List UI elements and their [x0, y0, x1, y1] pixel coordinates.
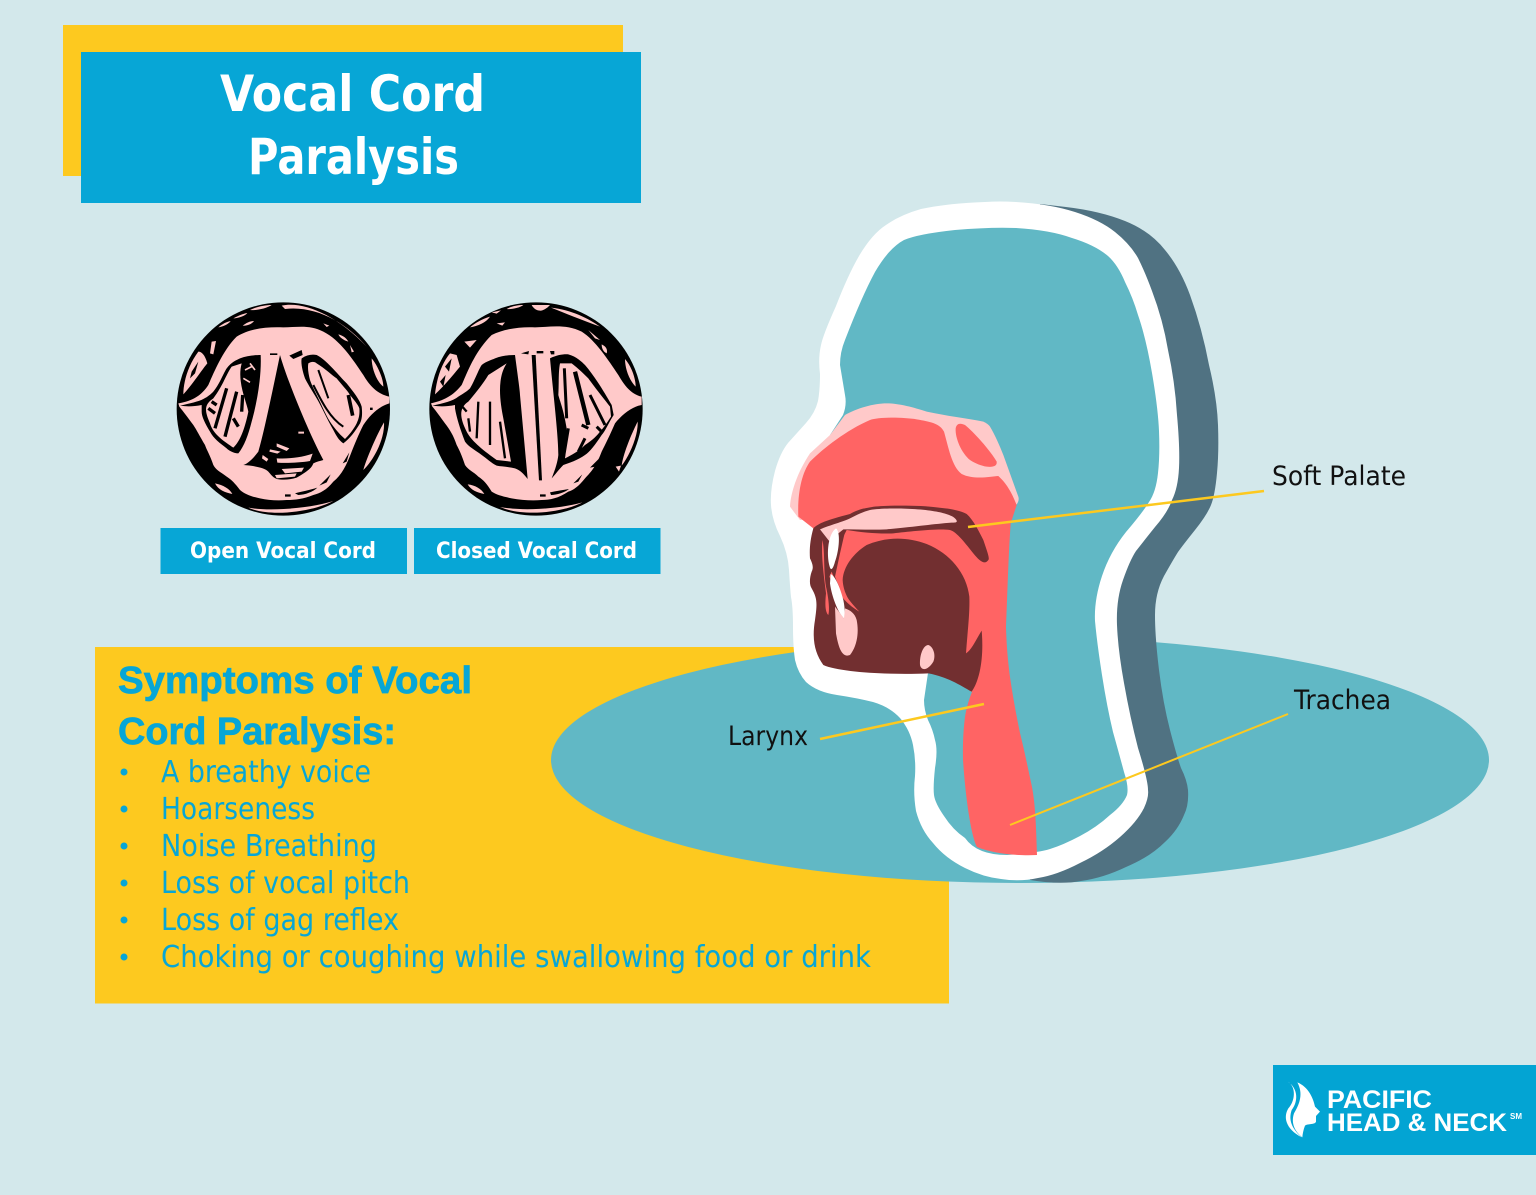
- logo: Pacific Head & Neck: PACIFIC: [1327, 1086, 1432, 1114]
- head shadow: [1030, 204, 1218, 883]
- panel: symptoms text: [118, 660, 872, 975]
- icon: closed vocal cord: [429, 302, 643, 516]
- panel: symptoms text: Choking or coughing while swallowing food or drink: [161, 940, 872, 975]
- line: larynx pointer: [820, 704, 984, 739]
- lower lip pink: [835, 607, 858, 656]
- panel: symptoms text: Noise Breathing: [161, 829, 377, 864]
- teeth: [828, 528, 845, 618]
- icon: face profile: [1286, 1082, 1320, 1137]
- line: soft palate pointer: [968, 491, 1264, 527]
- panel: symptoms text: Loss of vocal pitch: [161, 866, 410, 901]
- line: trachea pointer: [1010, 714, 1288, 825]
- label: larynx: Larynx: [728, 721, 808, 752]
- ellipse: head shadow base: [551, 637, 1489, 883]
- logo: Pacific Head & Neck: [1273, 1065, 1536, 1155]
- head teal fill: [830, 228, 1159, 855]
- panel: symptoms text: Loss of gag reflex: [161, 903, 399, 938]
- icon: open vocal cord: [177, 302, 390, 516]
- sinus cavity: [956, 424, 997, 467]
- panel: symptoms text: A breathy voice: [161, 755, 371, 790]
- throat and trachea red: [798, 418, 1037, 855]
- label: soft palate: Soft Palate: [1272, 461, 1406, 492]
- head white outline: [771, 202, 1179, 880]
- panel: symptoms text: Cord Paralysis:: [118, 711, 396, 753]
- label: open vocal cord: [160, 528, 407, 574]
- soft palate pink: [820, 508, 957, 543]
- label: closed vocal cord: [414, 528, 660, 574]
- panel: symptoms text: Symptoms of Vocal: [118, 660, 472, 702]
- illustration: head cross-section: [771, 202, 1218, 883]
- palate band maroon: [813, 506, 989, 562]
- logo: Pacific Head & Neck: SM: [1510, 1112, 1522, 1121]
- logo: Pacific Head & Neck: HEAD & NECK: [1327, 1109, 1507, 1137]
- red tongue edge: [829, 572, 859, 612]
- uvula pink: [920, 645, 934, 669]
- mouth and tongue maroon: [810, 528, 982, 692]
- label: open vocal cord: Open Vocal Cord: [190, 539, 376, 564]
- label: closed vocal cord: Closed Vocal Cord: [436, 539, 637, 564]
- title banner: [63, 25, 641, 203]
- panel: symptoms text: Hoarseness: [161, 792, 315, 827]
- label: trachea: Trachea: [1293, 685, 1391, 716]
- nasal cavity pink: [790, 403, 1019, 520]
- title banner: Paralysis: [248, 128, 459, 186]
- lip and tongue detail: [822, 540, 829, 615]
- title banner: Vocal Cord: [220, 65, 485, 123]
- panel: symptoms background: [95, 647, 949, 1004]
